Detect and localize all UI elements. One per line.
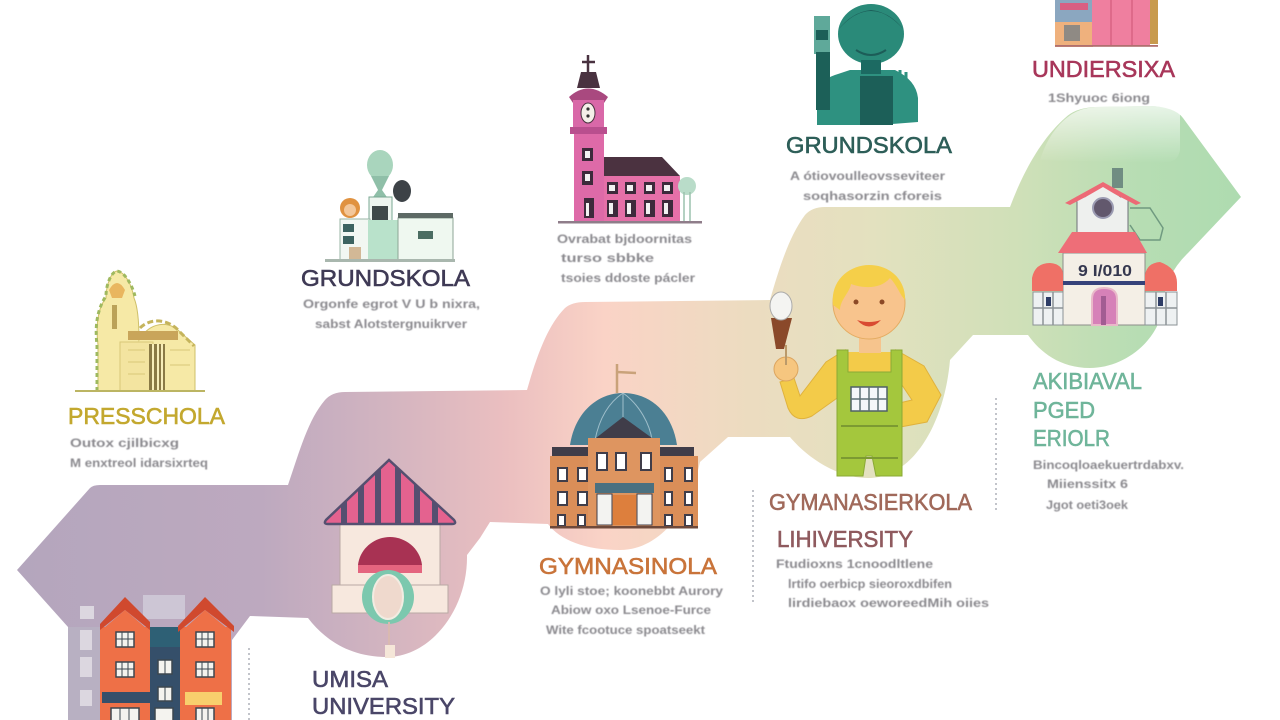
text: preschool description: M enxtreol idarsixrteq [70, 456, 208, 470]
heading: preschool: PRESSCHOLA [68, 403, 226, 429]
icon: green ribbon house: 9 I/010 [1078, 263, 1132, 280]
dotted dividers [249, 398, 996, 720]
text: preschool description: Outox cjilbicxg [70, 436, 179, 450]
icon: orange townhouse [68, 595, 234, 720]
heading: university bottom: UMISA [312, 666, 389, 692]
heading: grundskola right: GRUNDSKOLA [786, 132, 953, 158]
arrowhead highlight [1040, 106, 1180, 163]
text: universitet description: 1Shyuoc 6iong [1048, 91, 1150, 105]
heading: akademisk: PGED [1033, 397, 1095, 423]
heading: akademisk: ERIOLR [1033, 425, 1110, 451]
text: grundskola left description: sabst Alotstergnuikrver [315, 317, 467, 331]
text: akademisk description: Miienssitx 6 [1047, 477, 1128, 491]
heading: gymnasieskola and university right: LIHIVERSITY [777, 526, 913, 552]
heading: grundskola left: GRUNDSKOLA [301, 265, 471, 291]
text: grundskola right description: soqhasorzin cforeis [803, 189, 942, 203]
icon: grundskola building with globe [325, 150, 455, 262]
text: gymnasieskola centre description: O lyli stoe; koonebbt Aurory [540, 584, 723, 598]
text: grundskola right description: A ótiovoulleovsseviteer [790, 169, 945, 183]
text: church description: turso sbbke [561, 251, 654, 265]
text: grundskola left description: Orgonfe egrot V U b nixra, [303, 297, 480, 311]
icon: striped roof oven house [325, 455, 455, 658]
icon: teal person [814, 4, 918, 125]
text: church description [557, 232, 695, 285]
text: gymnasieskola centre description [540, 584, 723, 637]
text: akademisk description: Bincoqloaekuertrdabxv. [1033, 458, 1184, 472]
heading: universitet top right: UNDIERSIXA [1032, 56, 1176, 82]
text: preschool description [70, 436, 208, 470]
heading: gymnasieskola centre: GYMNASINOLA [539, 553, 718, 579]
text: gymnasieskola right description [776, 557, 989, 610]
heading: university bottom: UNIVERSITY [312, 693, 455, 719]
icon: domed gymnasium building [550, 364, 698, 528]
heading: akademisk [1033, 368, 1142, 451]
text: grundskola right description [790, 169, 945, 203]
icon: pink university building [1055, 0, 1158, 47]
icon: person with ice cream [770, 265, 941, 476]
text: gymnasieskola right description: lirdiebaox oeworeedMih oiies [788, 596, 989, 610]
heading: gymnasieskola and university right: GYMANASIERKOLA [769, 489, 973, 515]
text: akademisk description [1033, 458, 1184, 512]
text: gymnasieskola right description: lrtifo oerbicp sieoroxdbifen [788, 577, 952, 591]
heading: akademisk: AKIBIAVAL [1033, 368, 1142, 394]
icon: green ribbon house [1032, 168, 1177, 325]
icon: preschool building [75, 271, 205, 392]
icon: pink church tower [558, 55, 702, 224]
text: church description: tsoies ddoste pácler [561, 271, 695, 285]
text: gymnasieskola centre description: Abiow oxo Lsenoe-Furce [551, 603, 711, 617]
text: akademisk description: Jgot oeti3oek [1046, 498, 1128, 512]
text: gymnasieskola centre description: Wite fcootuce spoatseekt [546, 623, 705, 637]
text: gymnasieskola right description: Ftudioxns 1cnoodltlene [776, 557, 933, 571]
heading: gymnasieskola and university right [769, 489, 973, 552]
heading: university bottom [312, 666, 455, 719]
text: church description: Ovrabat bjdoornitas [557, 232, 692, 246]
text: grundskola left description [303, 297, 480, 331]
